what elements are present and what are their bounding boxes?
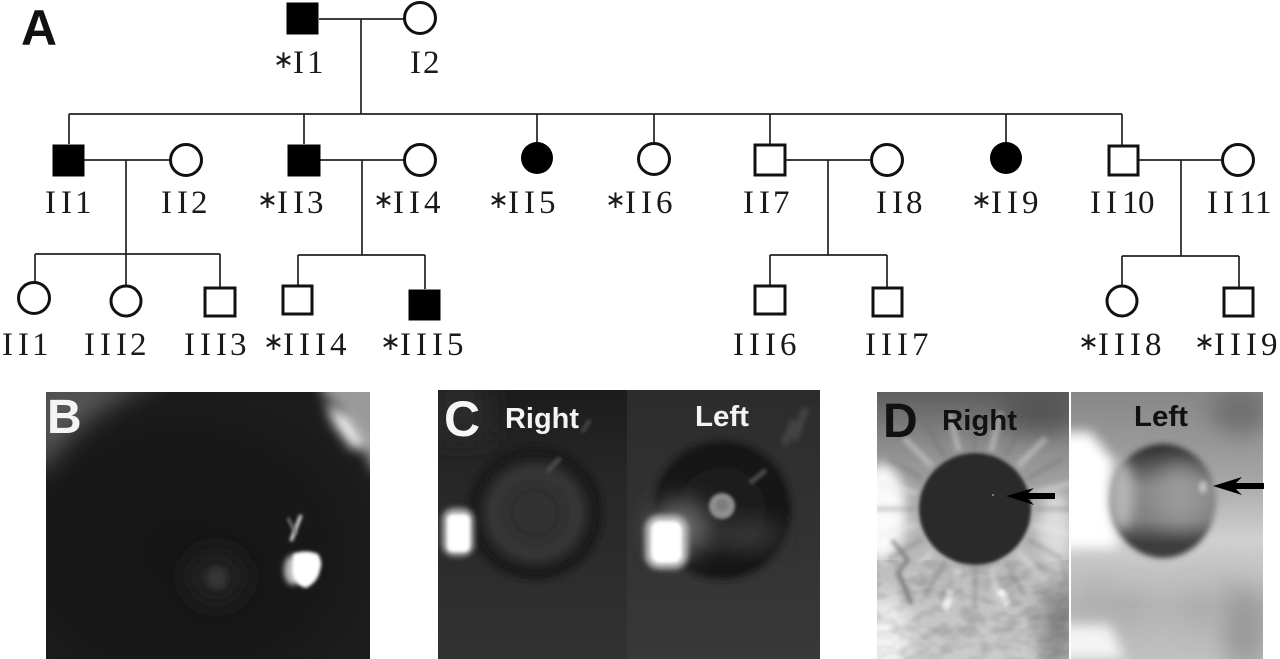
individual labels, generation III [2,327,1278,363]
individual labels, generation II: II8 [876,185,922,221]
individual labels, generation III: ∗ [1078,329,1099,356]
individual labels, generation I: I1 [293,45,324,81]
individual labels, generation III: III2 [84,327,146,363]
panel label D: D [883,395,918,448]
individual labels, generation II: ∗ [605,187,626,214]
generation III symbols [18,282,1253,320]
panel C: eye photographs, right and left [430,385,820,659]
individual labels, generation II: II2 [161,185,208,221]
arrow: left eye [1213,477,1264,495]
individual labels, generation II: ∗ [971,187,992,214]
individual labels, generation III: III4 [283,327,346,363]
individual labels, generation II: II3 [277,185,324,221]
individual labels, generation III: II1 [2,327,48,363]
individual labels, generation I [273,45,440,81]
individual labels, generation II: II4 [393,185,440,221]
panel A: pedigree chart [2,0,1278,363]
individual labels, generation II: II11 [1207,185,1272,221]
individual labels, generation II: II6 [625,185,672,221]
individual labels, generation III: III7 [865,327,928,363]
arrow: right eye [1006,488,1055,505]
individual labels, generation I: I2 [410,45,440,81]
left eye photograph [627,390,820,659]
right eye photograph [430,385,627,659]
individual labels, generation II: II7 [743,185,790,221]
left eye iris photograph [1071,392,1263,659]
individual labels, generation II: ∗ [488,187,509,214]
individual labels, generation II: ∗ [257,187,278,214]
individual labels, generation I: ∗ [273,47,294,74]
panel label B: B [47,391,82,444]
individual labels, generation II [45,185,1272,221]
connecting lines of the pedigree [35,19,1239,289]
label: Left: Left [1134,401,1188,433]
generation II symbols [53,142,1254,176]
individual labels, generation II: ∗ [373,187,394,214]
panel D: iris photographs, right and left [858,386,1270,659]
individual labels, generation II: II5 [508,185,556,221]
individual labels, generation III: ∗ [1194,329,1215,356]
individual labels, generation III: III5 [400,327,464,363]
individual labels, generation III: ∗ [263,329,284,356]
individual labels, generation II: II9 [991,185,1038,221]
right eye iris photograph [877,392,1069,659]
label: Right: Right [505,403,579,435]
individual labels, generation III: III8 [1098,327,1162,363]
individual labels, generation III: III6 [733,327,796,363]
panel B: dark eye photograph [46,392,370,659]
individual labels, generation III: III3 [184,327,246,363]
individual labels, generation III: ∗ [380,329,401,356]
individual labels, generation II: II10 [1090,185,1154,221]
individual labels, generation III: III9 [1214,327,1278,363]
generation I symbols [287,2,436,34]
label: Right: Right [942,405,1017,437]
label: Left: Left [695,401,749,433]
individual labels, generation II: II1 [45,185,92,221]
heading: panel label A: A [21,0,57,56]
panel label C: C [444,391,480,447]
